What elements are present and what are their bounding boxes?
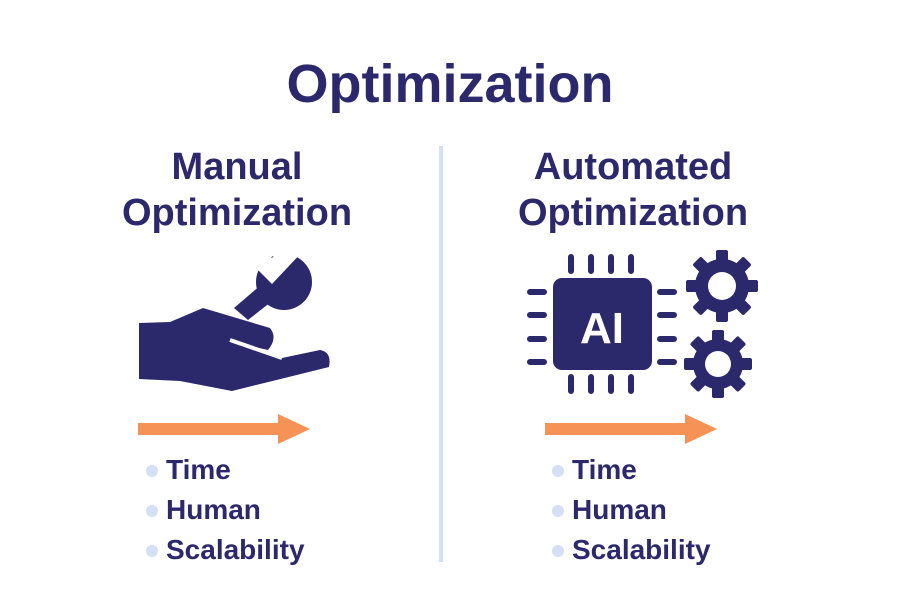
heading: automated: Automated [534,146,732,188]
list: automated: Scalability [572,534,711,565]
heading: manual: Optimization [122,192,352,234]
list: automated [552,454,711,565]
heading: manual: Manual [172,146,302,188]
list: automated: Time [572,454,637,485]
heading: automated: Optimization [518,192,748,234]
icon: AI chip and gears [527,250,758,398]
gear top [686,250,758,322]
list: manual: Scalability [166,534,305,565]
title: Optimization [286,54,613,114]
icon: hand with wrench [139,256,330,391]
heading: automated [518,146,748,234]
list: manual [146,454,305,565]
list: manual: Time [166,454,231,485]
divider [439,146,443,562]
icon: AI chip and gears: AI [580,304,624,353]
heading: manual [122,146,352,234]
gear bottom [684,330,752,398]
list: manual: Human [166,494,261,525]
arrow: right [545,414,717,444]
arrow: left [138,414,310,444]
list: automated: Human [572,494,667,525]
